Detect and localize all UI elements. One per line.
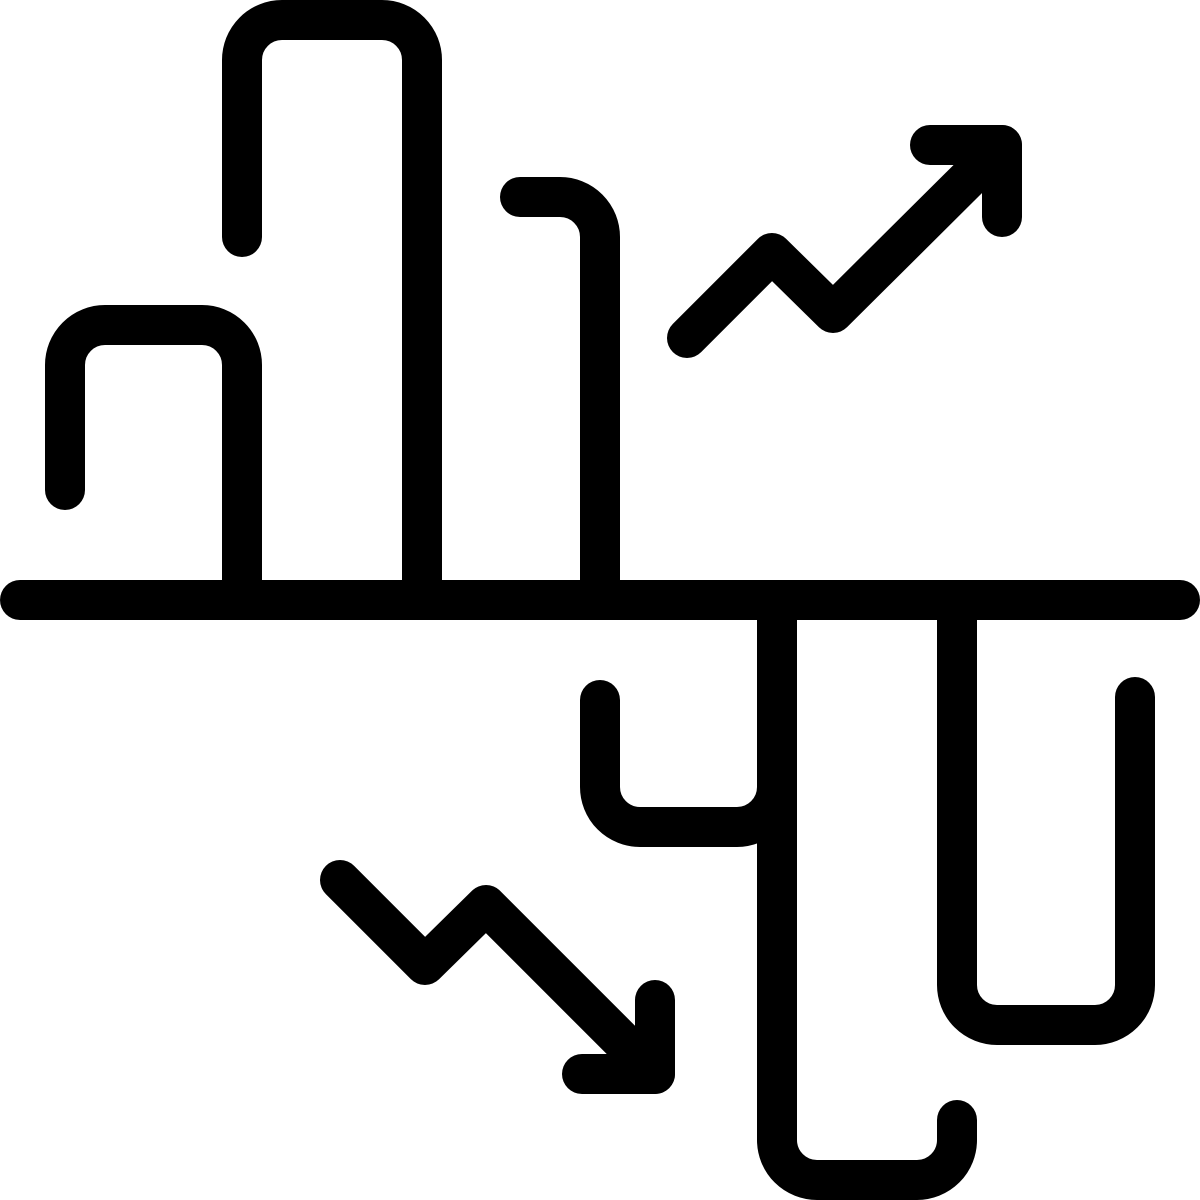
bar 1 (up, short) bbox=[65, 325, 242, 600]
baseline axis bbox=[20, 580, 1180, 620]
bar 6 (down, medium) bbox=[957, 600, 1135, 1025]
bar 4 (down, short) bbox=[600, 600, 777, 827]
arrow: upward trend bbox=[687, 145, 1002, 338]
bar 5 (down, longest) bbox=[777, 600, 957, 1180]
bar 2 (up, tall) bbox=[242, 20, 422, 600]
arrow: downward trend bbox=[340, 880, 655, 1074]
bar 3 (up, medium) bbox=[520, 197, 600, 600]
